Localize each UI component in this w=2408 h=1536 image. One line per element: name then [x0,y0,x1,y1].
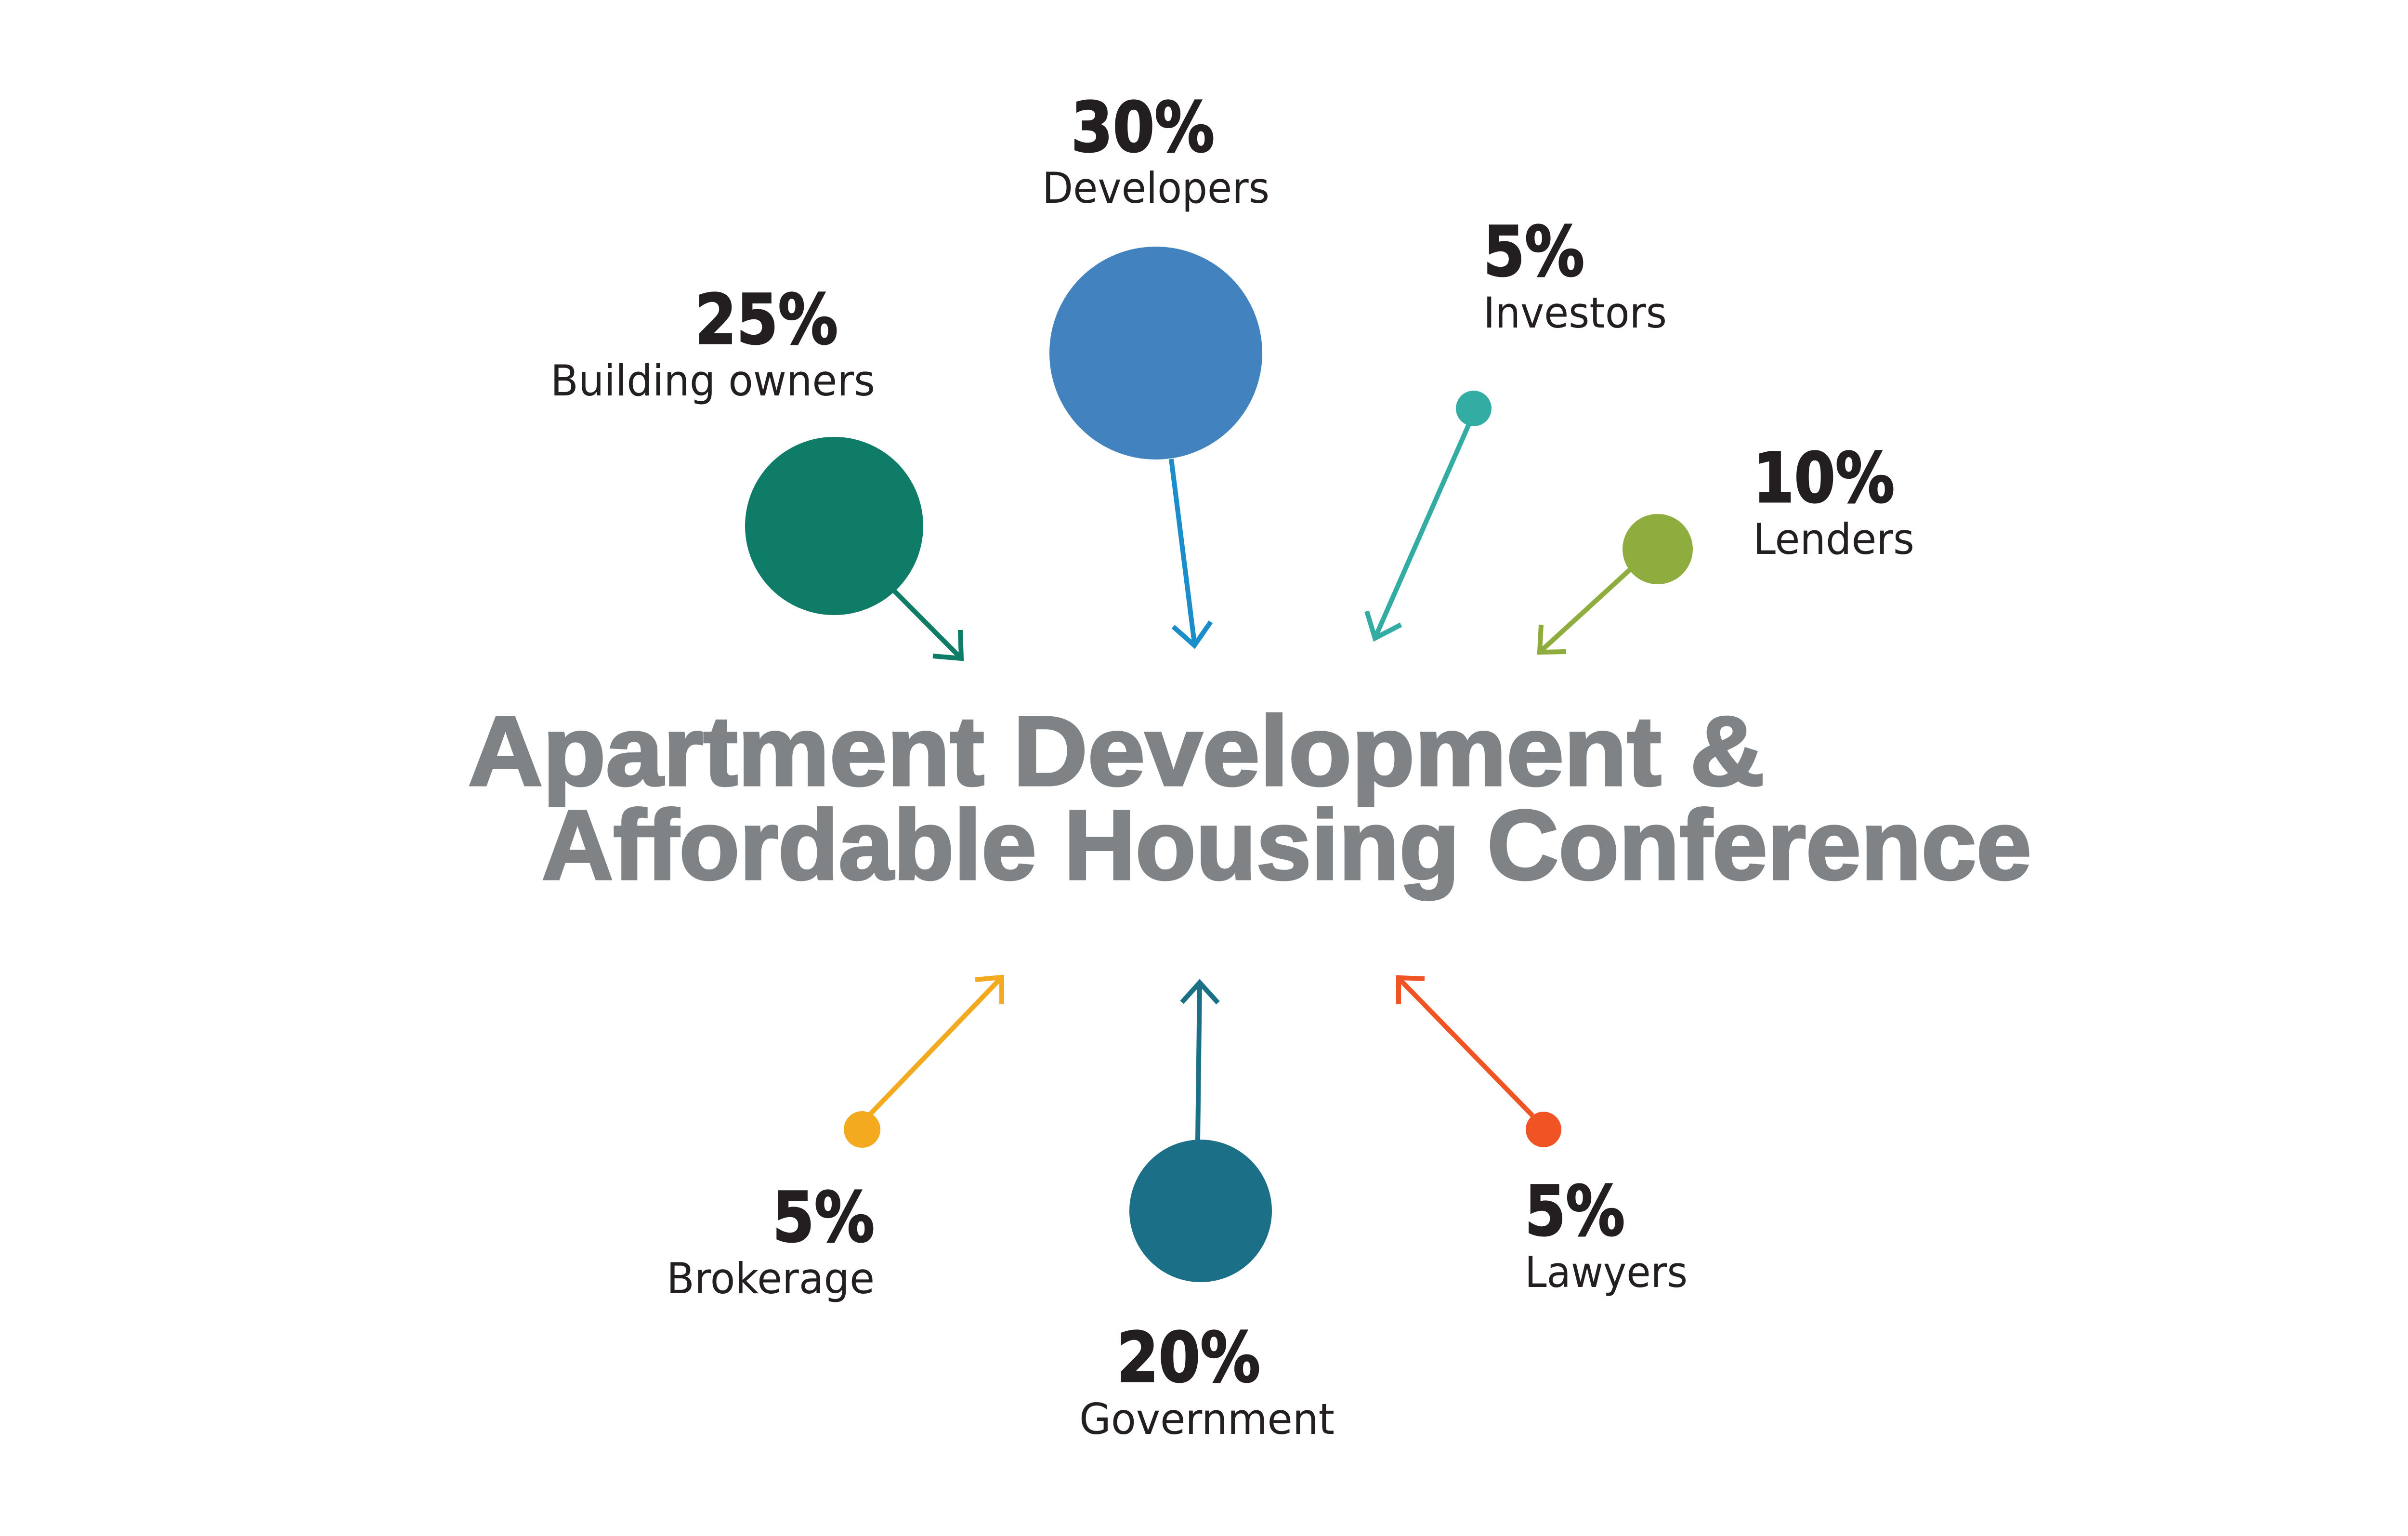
circle: investors [1456,391,1492,426]
circle: developers [1049,247,1262,459]
label: investors: Investors [1483,288,1667,338]
label: building owners: Building owners [550,356,875,406]
segment: lenders [1540,438,1914,652]
label: government: Government [1079,1394,1335,1444]
arrow: lenders [1540,570,1630,652]
arrow: building owners [894,591,961,658]
percentage: government: 20% [1117,1317,1260,1398]
arrow: investors [1367,424,1469,638]
percentage: lawyers: 5% [1525,1171,1625,1251]
title: Affordable Housing Conference [542,790,2031,900]
segment: investors [1367,211,1667,638]
segment: building owners [550,279,961,658]
percentage: brokerage: 5% [772,1177,875,1258]
segment: brokerage [667,977,1002,1303]
label: brokerage: Brokerage [667,1254,875,1303]
title: Apartment Development & [468,696,1765,806]
segment: developers [1042,87,1269,645]
arrow: developers [1171,459,1211,645]
percentage: building owners: 25% [695,279,838,360]
label: lenders: Lenders [1753,514,1914,564]
percentage: developers: 30% [1071,87,1215,168]
arrow: government [1182,983,1218,1140]
circle: lenders [1623,514,1693,584]
circle: government [1129,1140,1272,1282]
percentage: lenders: 10% [1753,438,1895,518]
arrow: brokerage [870,977,1002,1114]
arrow: lawyers [1399,978,1532,1116]
circle: lawyers [1526,1112,1561,1147]
label: lawyers: Lawyers [1525,1247,1688,1297]
circle: brokerage [844,1111,880,1148]
segment: government [1079,983,1335,1444]
label: developers: Developers [1042,163,1269,213]
percentage: investors: 5% [1483,211,1584,292]
title [468,696,2031,900]
circle: building owners [745,437,923,615]
segment: lawyers [1399,978,1688,1297]
